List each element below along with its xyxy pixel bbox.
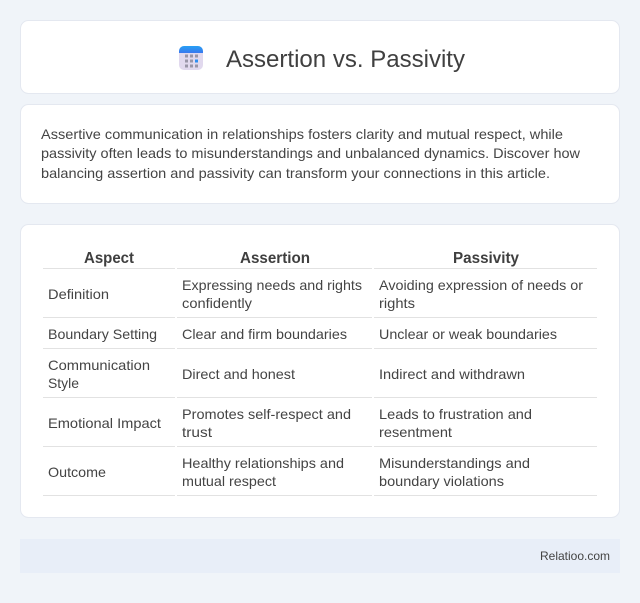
intro text: passivity often leads to misunderstandings and unbalanced dynamics. Discover how (41, 145, 581, 161)
footer text: Relatioo.com (540, 549, 610, 563)
row: definition (48, 277, 583, 311)
row: outcome: boundary violations (379, 473, 504, 489)
row: definition: Avoiding expression of needs or (379, 277, 583, 293)
row: definition: Definition (48, 286, 109, 302)
row: emotional impact: Promotes self-respect and (182, 406, 351, 422)
table header: Aspect (84, 250, 135, 267)
row: definition: Expressing needs and rights (182, 277, 362, 293)
footer bar (20, 539, 620, 573)
row: definition: confidently (182, 295, 252, 311)
row: communication style: Style (48, 375, 79, 391)
row: outcome: Healthy relationships and (182, 455, 344, 471)
icon: calendar (179, 46, 203, 70)
intro text: balancing assertion and passivity can transform your connections in this article. (41, 165, 550, 181)
row: communication style: Communication (48, 357, 150, 373)
row: outcome: mutual respect (182, 473, 276, 489)
intro text (41, 126, 581, 181)
table header: Passivity (453, 250, 519, 267)
row: communication style: Direct and honest (182, 366, 295, 382)
intro text: Assertive communication in relationships fosters clarity and mutual respect, while (41, 126, 563, 142)
row: boundary setting: Boundary Setting (48, 326, 157, 342)
row: emotional impact: Emotional Impact (48, 415, 161, 431)
row: emotional impact: trust (182, 424, 212, 440)
row: boundary setting: Clear and firm boundaries (182, 326, 347, 342)
row: outcome (48, 455, 530, 489)
row: emotional impact: resentment (379, 424, 452, 440)
row: communication style (48, 357, 525, 391)
row: emotional impact (48, 406, 532, 440)
row: communication style: Indirect and withdrawn (379, 366, 525, 382)
panel: introduction (20, 104, 620, 204)
row: boundary setting: Unclear or weak boundaries (379, 326, 557, 342)
panel: comparison table (20, 224, 620, 518)
title: Assertion vs. Passivity (226, 46, 465, 73)
panel: title card (20, 20, 620, 94)
row: outcome: Misunderstandings and (379, 455, 530, 471)
row: definition: rights (379, 295, 415, 311)
row: boundary setting (48, 326, 557, 342)
table header (84, 250, 519, 267)
row: outcome: Outcome (48, 464, 106, 480)
table header: Assertion (240, 250, 310, 267)
row: emotional impact: Leads to frustration and (379, 406, 532, 422)
